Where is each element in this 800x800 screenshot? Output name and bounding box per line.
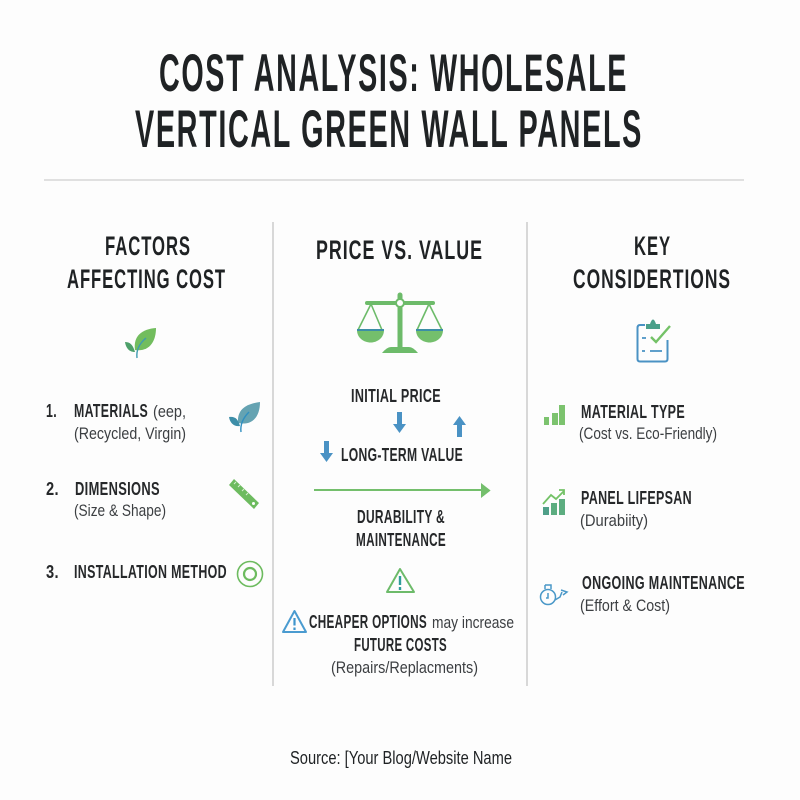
item 2: dimensions: DIMENSIONS (75, 478, 160, 499)
icon: ring target (238, 562, 262, 586)
arrow: down left (320, 441, 333, 462)
text: cheaper options warning: CHEAPER OPTIONS (309, 611, 427, 632)
icon: watering can timer (540, 585, 567, 604)
label: long-term value: LONG-TERM VALUE (341, 444, 463, 465)
item: material type: (Cost vs. Eco-Friendly) (579, 424, 717, 443)
item: panel lifespan: (Durabiity) (580, 511, 648, 530)
icon: green leaf (125, 328, 156, 358)
icon: balance scale (357, 295, 443, 353)
text: cheaper options warning: FUTURE COSTS (354, 634, 447, 655)
label: initial price: INITIAL PRICE (351, 385, 441, 406)
item: ongoing maintenance: (Effort & Cost) (580, 596, 670, 615)
panel: key considerations (540, 231, 745, 615)
icon: green warning triangle (387, 569, 414, 592)
heading: factors affecting cost: FACTORS (105, 231, 191, 261)
heading: key considertions (573, 231, 731, 294)
arrow: green horizontal (314, 485, 489, 496)
item: panel lifespan (580, 487, 692, 530)
icon: ruler (229, 479, 259, 509)
text: cheaper options warning: (Repairs/Replacments) (331, 658, 478, 677)
label: durability and maintenance: MAINTENANCE (356, 529, 446, 550)
item: material type (579, 401, 717, 443)
item 2: dimensions (46, 478, 166, 520)
item 1: materials (46, 400, 186, 443)
item 2: dimensions: (Size & Shape) (74, 501, 166, 520)
item 3: installation method (46, 561, 227, 582)
arrow: down (393, 412, 406, 433)
label: durability and maintenance: DURABILITY & (357, 506, 445, 527)
text: cheaper options warning: may increase (432, 613, 514, 632)
icon: teal leaf (229, 402, 260, 432)
item 2: dimensions: 2. (46, 478, 59, 499)
item: material type: MATERIAL TYPE (581, 401, 685, 422)
item 1: materials: (eep, (153, 402, 186, 421)
label: durability and maintenance (356, 506, 446, 550)
heading: factors affecting cost (67, 231, 226, 294)
item 3: installation method: INSTALLATION METHOD (74, 561, 227, 582)
heading: factors affecting cost: AFFECTING COST (67, 264, 226, 294)
icon: clipboard checklist (638, 320, 670, 362)
item 1: materials: (Recycled, Virgin) (74, 424, 186, 443)
icon: growth chart (543, 490, 565, 515)
icon: bar chart (544, 405, 565, 425)
icon: blue warning triangle (283, 611, 306, 632)
text: cheaper options warning (309, 611, 514, 677)
item 1: materials: 1. (46, 400, 57, 421)
heading: price vs. value: PRICE VS. VALUE (316, 235, 483, 265)
panel: factors affecting cost (46, 231, 262, 586)
title (135, 44, 643, 159)
panel: price vs. value (283, 235, 514, 677)
item: panel lifespan: PANEL LIFEPSAN (581, 487, 692, 508)
arrow: up (453, 416, 466, 437)
item 3: installation method: 3. (46, 561, 59, 582)
source line: Source: [Your Blog/Website Name (290, 748, 512, 768)
item: ongoing maintenance (580, 572, 745, 615)
item 1: materials: MATERIALS (74, 400, 148, 421)
heading: key considertions: KEY (634, 231, 671, 261)
